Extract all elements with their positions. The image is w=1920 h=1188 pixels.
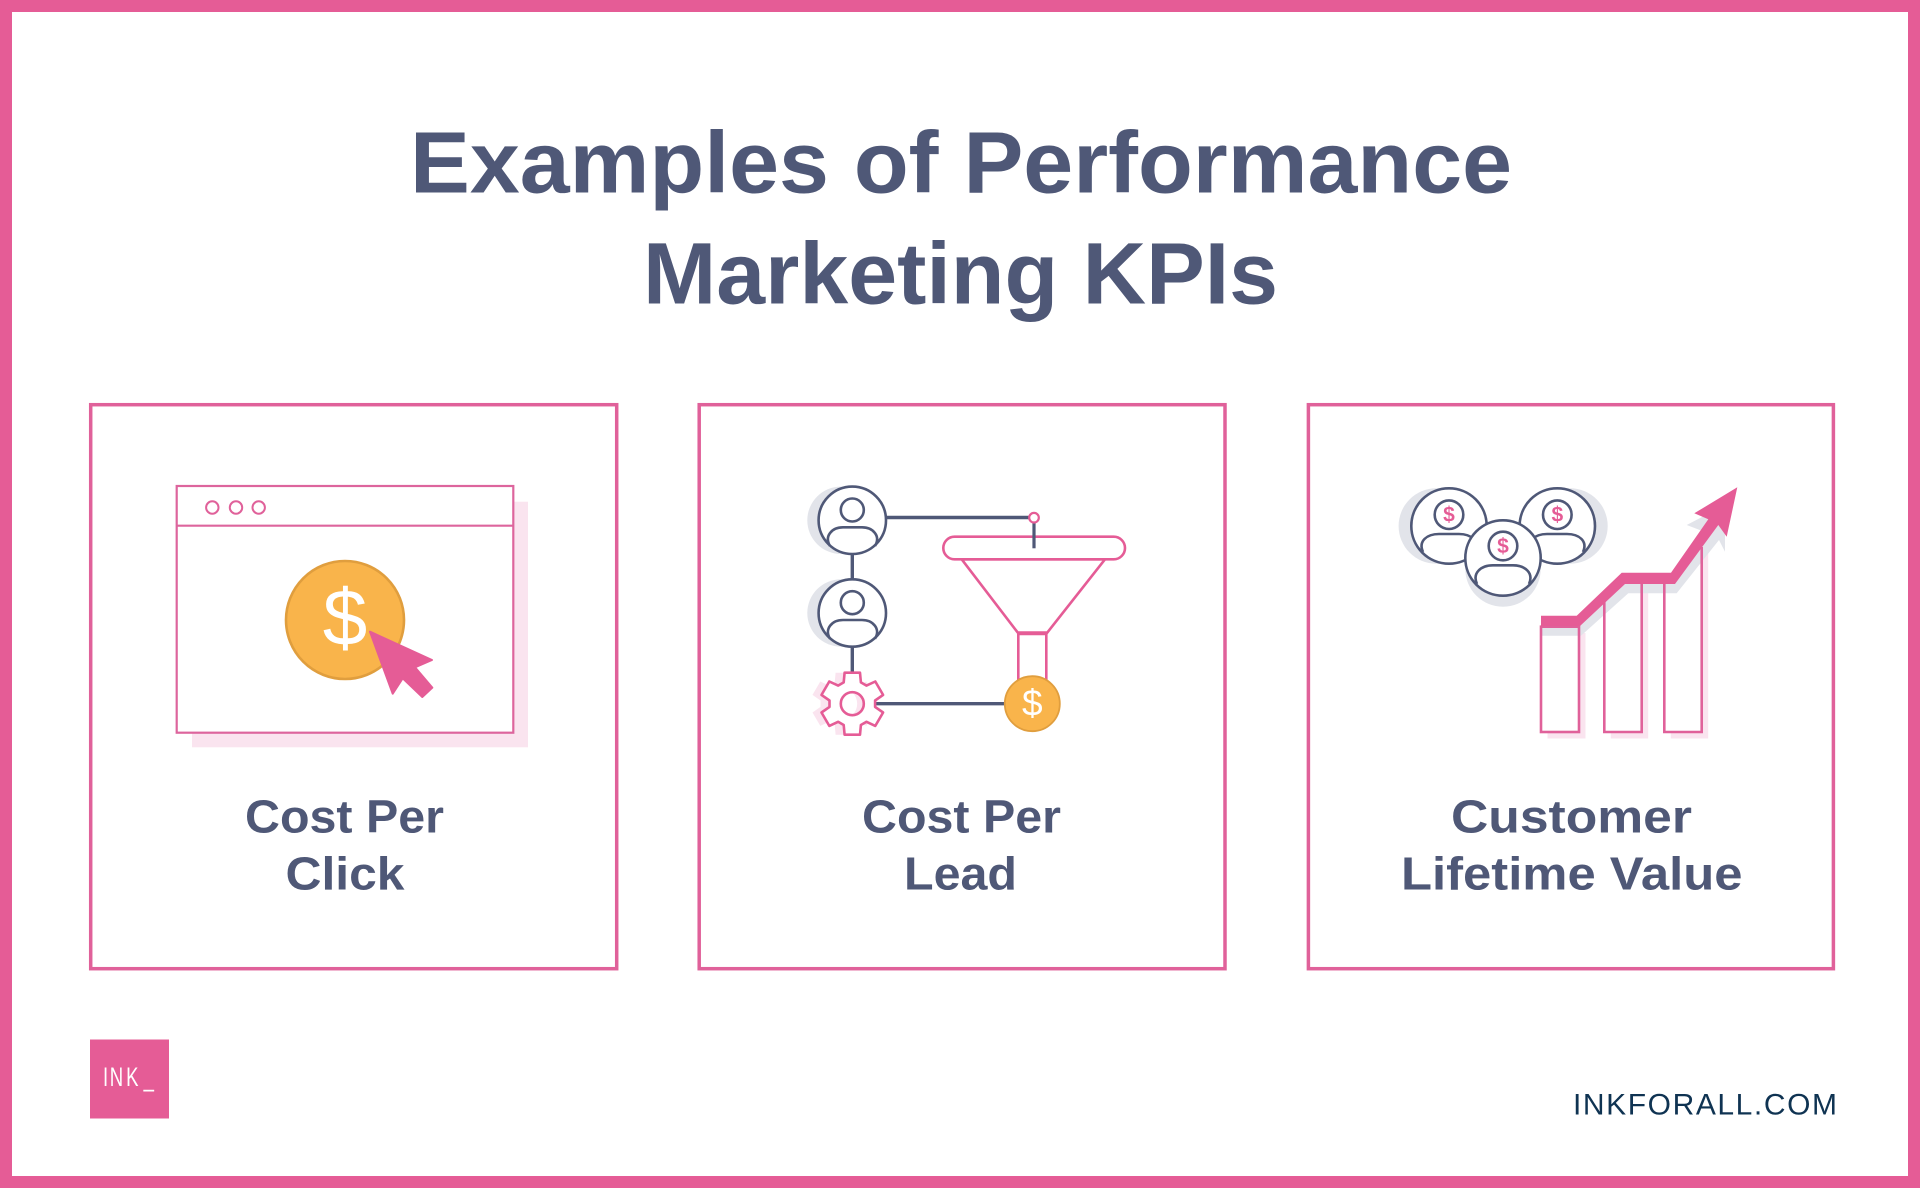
title: Marketing KPIs — [643, 225, 1278, 322]
label: cost per lead: Lead — [904, 847, 1017, 899]
icon: browser window with coin and cursor: $ — [323, 573, 367, 662]
footer url: INKFORALL.COM — [1573, 1088, 1837, 1121]
icon: customers with dollar signs: $ — [1497, 535, 1509, 558]
panel: cost per lead — [699, 405, 1225, 969]
icon: lead funnel: $ — [1022, 682, 1043, 724]
label: cost per lead: Cost Per — [862, 790, 1061, 842]
icon: customers with dollar signs: $ — [1551, 504, 1563, 526]
panel: cost per click — [91, 405, 617, 969]
label: customer lifetime value: Customer — [1451, 790, 1692, 842]
icon: browser window with coin and cursor — [177, 486, 528, 747]
panel: customer lifetime value — [1308, 405, 1833, 969]
icon: customers with dollar signs — [1399, 488, 1608, 607]
label: cost per click: Cost Per — [245, 790, 444, 842]
icon: lead funnel — [807, 487, 1125, 735]
label: cost per lead — [862, 790, 1061, 899]
label: cost per click: Click — [286, 847, 405, 899]
label: customer lifetime value: Lifetime Value — [1401, 847, 1742, 899]
logo: INK: INK_ — [103, 1062, 154, 1092]
icon: bar chart with rising arrow — [1541, 487, 1737, 738]
logo: INK — [90, 1040, 169, 1118]
title: Examples of Performance — [410, 115, 1512, 212]
label: cost per click — [245, 790, 444, 899]
label: customer lifetime value — [1401, 790, 1742, 899]
title — [410, 115, 1512, 322]
icon: customers with dollar signs: $ — [1443, 504, 1455, 526]
